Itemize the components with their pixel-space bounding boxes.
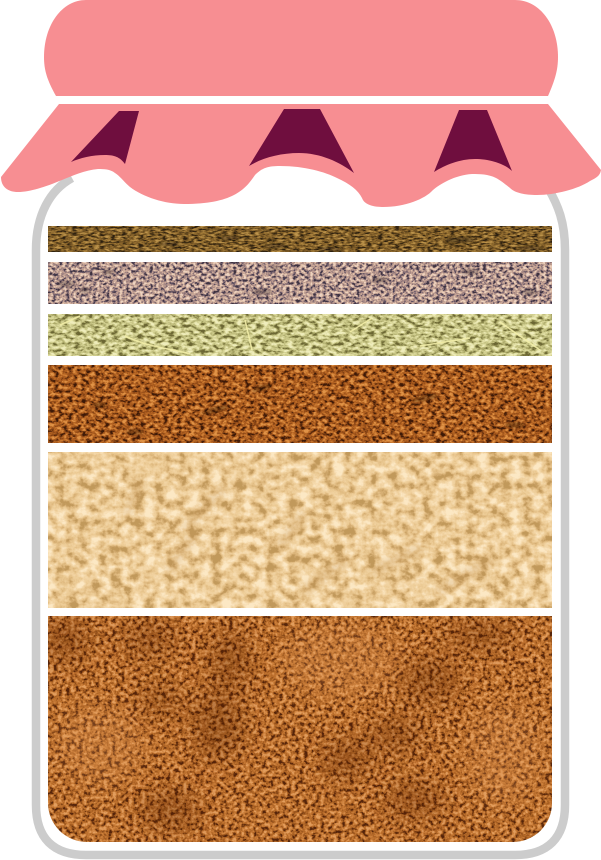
layer 4: rust orange spice	[48, 365, 552, 443]
layer 6: bottom cinnamon powder	[41, 616, 552, 842]
cloth lid top	[44, 0, 558, 96]
layer 3: pale green herb	[48, 314, 552, 356]
layer 2: pink and grey speckled spice	[48, 262, 552, 304]
layer 1: dark brown spice	[48, 226, 552, 252]
jar outline	[36, 178, 565, 855]
cloth lid skirt	[1, 104, 601, 207]
layer 5: pale cream powder	[48, 452, 552, 608]
right fold shadow	[434, 110, 512, 172]
left fold shadow	[71, 111, 139, 164]
centre fold shadow	[249, 109, 354, 173]
